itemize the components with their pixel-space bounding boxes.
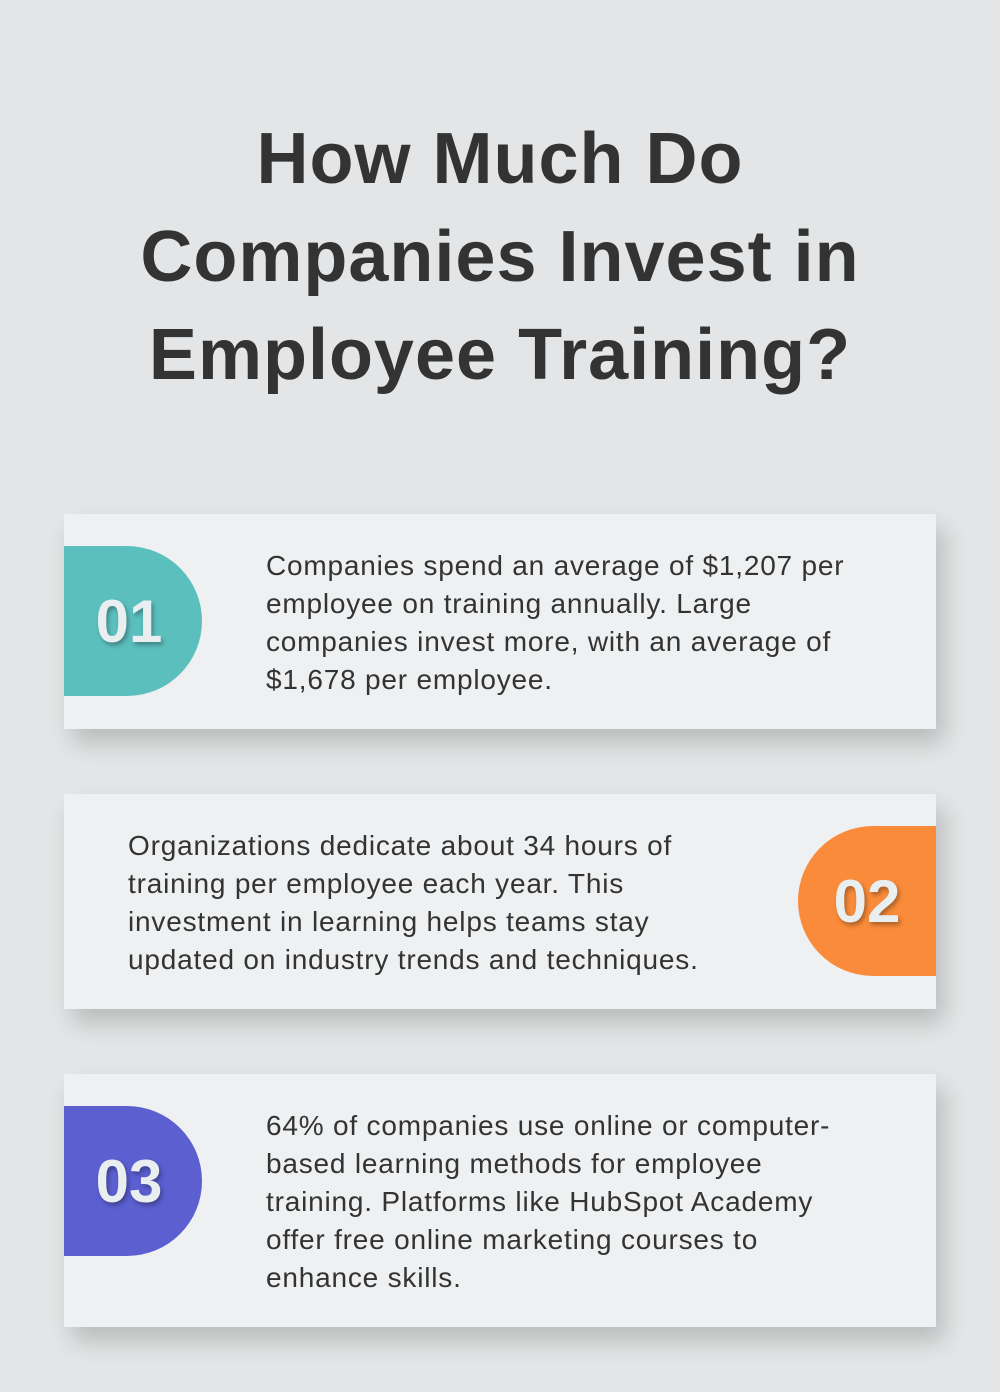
text: card 1: employee on training annually. Large	[266, 588, 752, 619]
text: card 3: training. Platforms like HubSpot Academy	[266, 1186, 813, 1217]
text: card 1: companies invest more, with an average of	[266, 626, 831, 657]
text: card 2: Organizations dedicate about 34 hours of	[128, 830, 672, 861]
title: How Much Do	[257, 119, 743, 199]
panel: card 3	[64, 1074, 936, 1327]
text: card 1: $1,678 per employee.	[266, 664, 553, 695]
badge: 03: 03	[96, 1148, 162, 1214]
title: Employee Training?	[149, 315, 851, 395]
text: card 3	[266, 1110, 830, 1293]
badge: 02	[798, 826, 936, 976]
panel: card 2	[64, 794, 936, 1009]
text: card 3: based learning methods for employee	[266, 1148, 763, 1179]
text: card 2: training per employee each year. This	[128, 868, 624, 899]
text: card 2: investment in learning helps teams stay	[128, 906, 649, 937]
text: card 2	[128, 830, 699, 975]
text: card 1: Companies spend an average of $1,207 per	[266, 550, 844, 581]
title	[140, 119, 860, 395]
badge: 01: 01	[96, 588, 162, 654]
text: card 3: enhance skills.	[266, 1262, 462, 1293]
badge: 03	[64, 1106, 202, 1256]
badge: 02: 02	[834, 868, 900, 934]
text: card 3: 64% of companies use online or computer-	[266, 1110, 830, 1141]
text: card 3: offer free online marketing courses to	[266, 1224, 758, 1255]
title: Companies Invest in	[140, 217, 860, 297]
badge: 01	[64, 546, 202, 696]
text: card 1	[266, 550, 844, 695]
panel: card 1	[64, 514, 936, 729]
text: card 2: updated on industry trends and techniques.	[128, 944, 699, 975]
